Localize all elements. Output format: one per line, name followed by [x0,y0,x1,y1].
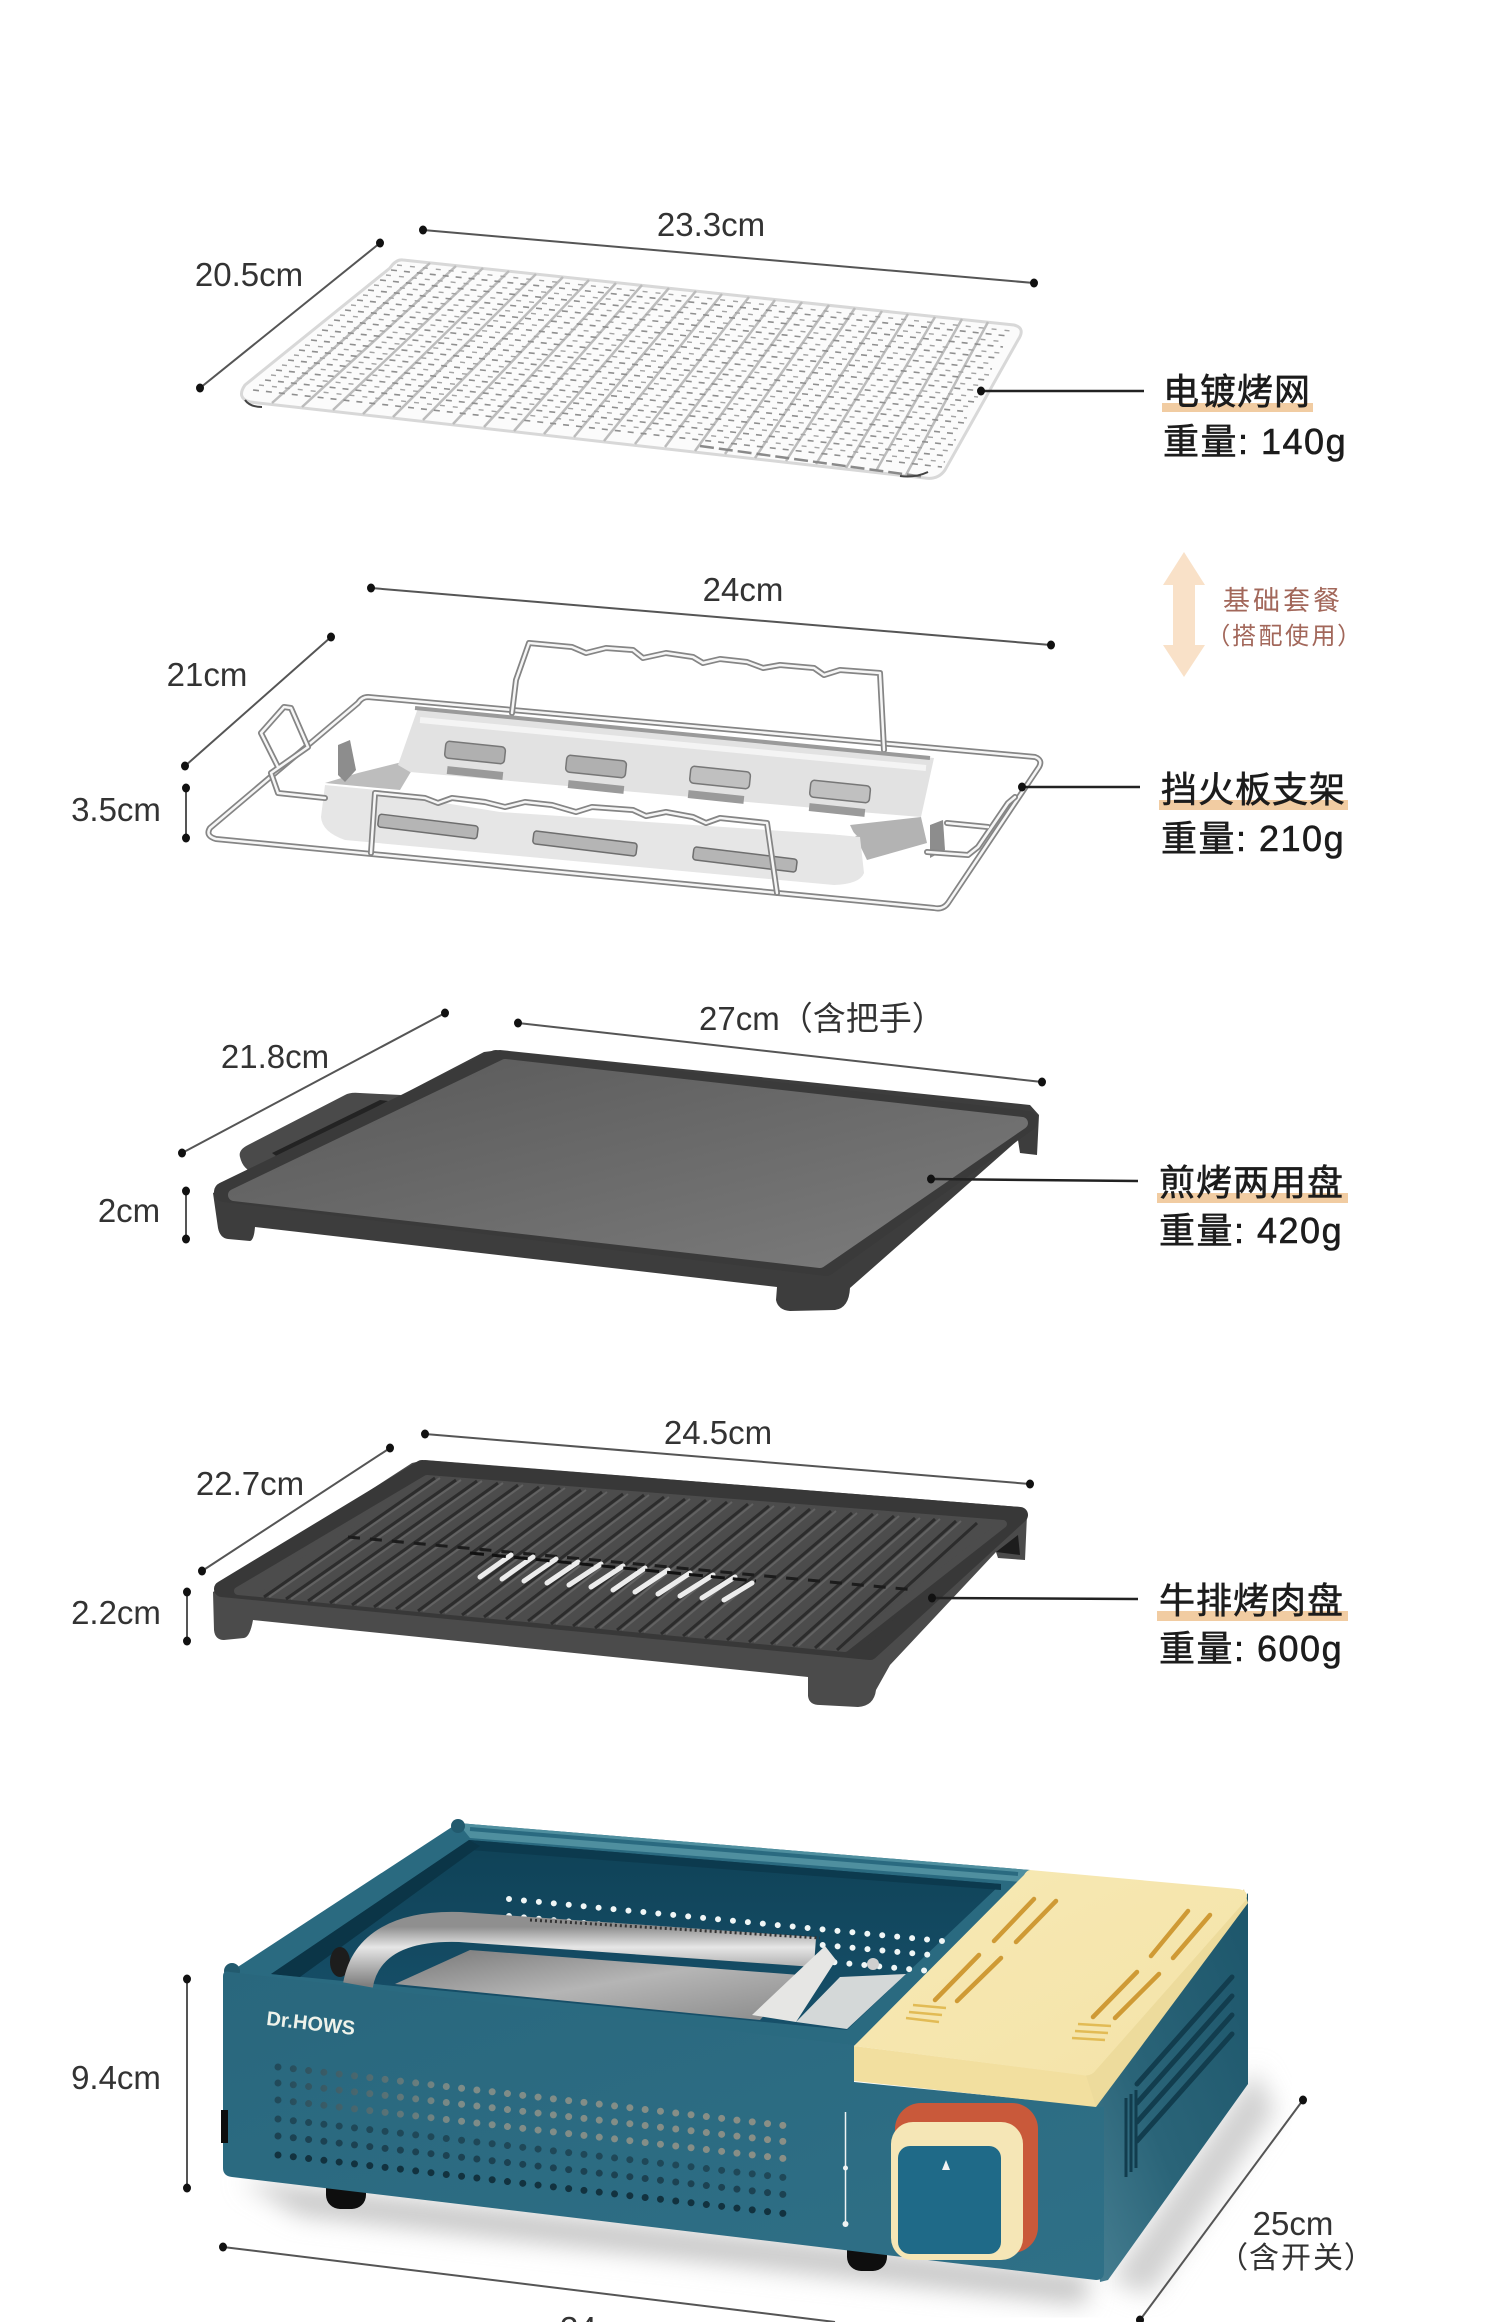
dimension: 9.4cm: 9.4cm [71,2059,161,2096]
dimension: 24.5cm [421,1414,1034,1488]
callout: steak plate: 重量: 600g [1159,1628,1343,1669]
burner shadow [240,2070,1275,2305]
panel: steak grill plate [71,1414,1348,1707]
callout: bracket: 重量: 210g [1161,818,1345,859]
rear shield plate [325,708,934,860]
panel: portable burner [71,1819,1362,2322]
front handle [371,793,777,893]
dimension: 20.5cm [195,238,384,392]
dimension: 3.5cm [71,784,190,842]
callout: griddle: 重量: 420g [1159,1210,1343,1251]
dimension: 27cm with handle [514,1000,1046,1086]
brand logo: Dr.HOWS [265,2008,356,2040]
panel: griddle plate [98,1000,1348,1311]
burner feet [326,2165,887,2271]
drain slots [470,1553,756,1600]
rack mesh [241,260,1021,478]
dimension: 34cm [219,2242,835,2322]
callout: steak plate: 牛排烤肉盘 [1159,1580,1344,1621]
plate ridges [264,1478,977,1650]
dimension: 2.2cm [71,1588,191,1646]
interior cavity [224,1819,1040,2046]
icon: double arrow with basic set note [1163,552,1352,677]
dimension: 25cm with switch [1136,2096,1362,2322]
dimension: 2.2cm: 2.2cm [71,1594,161,1631]
dimension: 23.3cm [419,206,1038,288]
front shield plate [321,785,864,885]
dimension: 9.4cm [71,1974,191,2192]
plate body and feet [213,1460,1027,1707]
ignition knob [891,2103,1038,2260]
icon: double arrow with basic set note: （搭配使用） [1218,623,1352,650]
white perforation dots inside [509,1899,942,1971]
side handles [261,707,1015,858]
dimension: 24cm: 24cm [703,571,783,608]
dimension: 2cm [98,1186,190,1244]
dimension: 21cm: 21cm [167,656,247,693]
yellow lid [854,1870,1248,2107]
dimension: 20.5cm: 20.5cm [195,256,303,293]
level scale [842,2112,848,2227]
griddle body and feet [213,1050,1039,1311]
callout: rack: 重量: 140g [1163,421,1347,462]
dimension: 25cm with switch: 25cm [1253,2205,1333,2242]
callout: bracket [1018,769,1348,859]
callout: rack [977,371,1347,462]
dimension: 23.3cm: 23.3cm [657,206,765,243]
callout: steak plate [928,1580,1348,1669]
wire frame [208,697,1040,908]
dimension: 2cm: 2cm [98,1192,160,1229]
white bracket [752,1946,906,2029]
dimension: 21.8cm: 21.8cm [221,1038,329,1075]
dimension: 21.8cm [178,1008,449,1158]
icon: double arrow with basic set note: 基础套餐 [1223,586,1343,616]
dimension: 22.7cm [196,1444,394,1576]
burner tube and pan [330,1920,820,2020]
front perforations [278,2067,788,2214]
front panel [221,1972,1104,2280]
dimension: 3.5cm: 3.5cm [71,791,161,828]
callout: griddle [927,1162,1348,1251]
dimension: 22.7cm: 22.7cm [196,1465,304,1502]
dimension: 24.5cm: 24.5cm [664,1414,772,1451]
griddle handle [240,1093,401,1175]
panel: flame shield bracket [71,571,1348,908]
rear handle [512,643,884,750]
dimension: 24cm [367,571,1055,650]
callout: bracket: 挡火板支架 [1161,769,1346,810]
dimension: 25cm with switch: （含开关） [1232,2242,1362,2275]
right side panel [1090,1893,1248,2282]
callout: rack: 电镀烤网 [1163,371,1311,412]
panel: wire grill rack [195,206,1347,478]
dimension: 27cm with handle: 27cm（含把手） [699,1000,945,1037]
callout: griddle: 煎烤两用盘 [1159,1162,1344,1203]
dimension: 21cm [167,632,335,770]
